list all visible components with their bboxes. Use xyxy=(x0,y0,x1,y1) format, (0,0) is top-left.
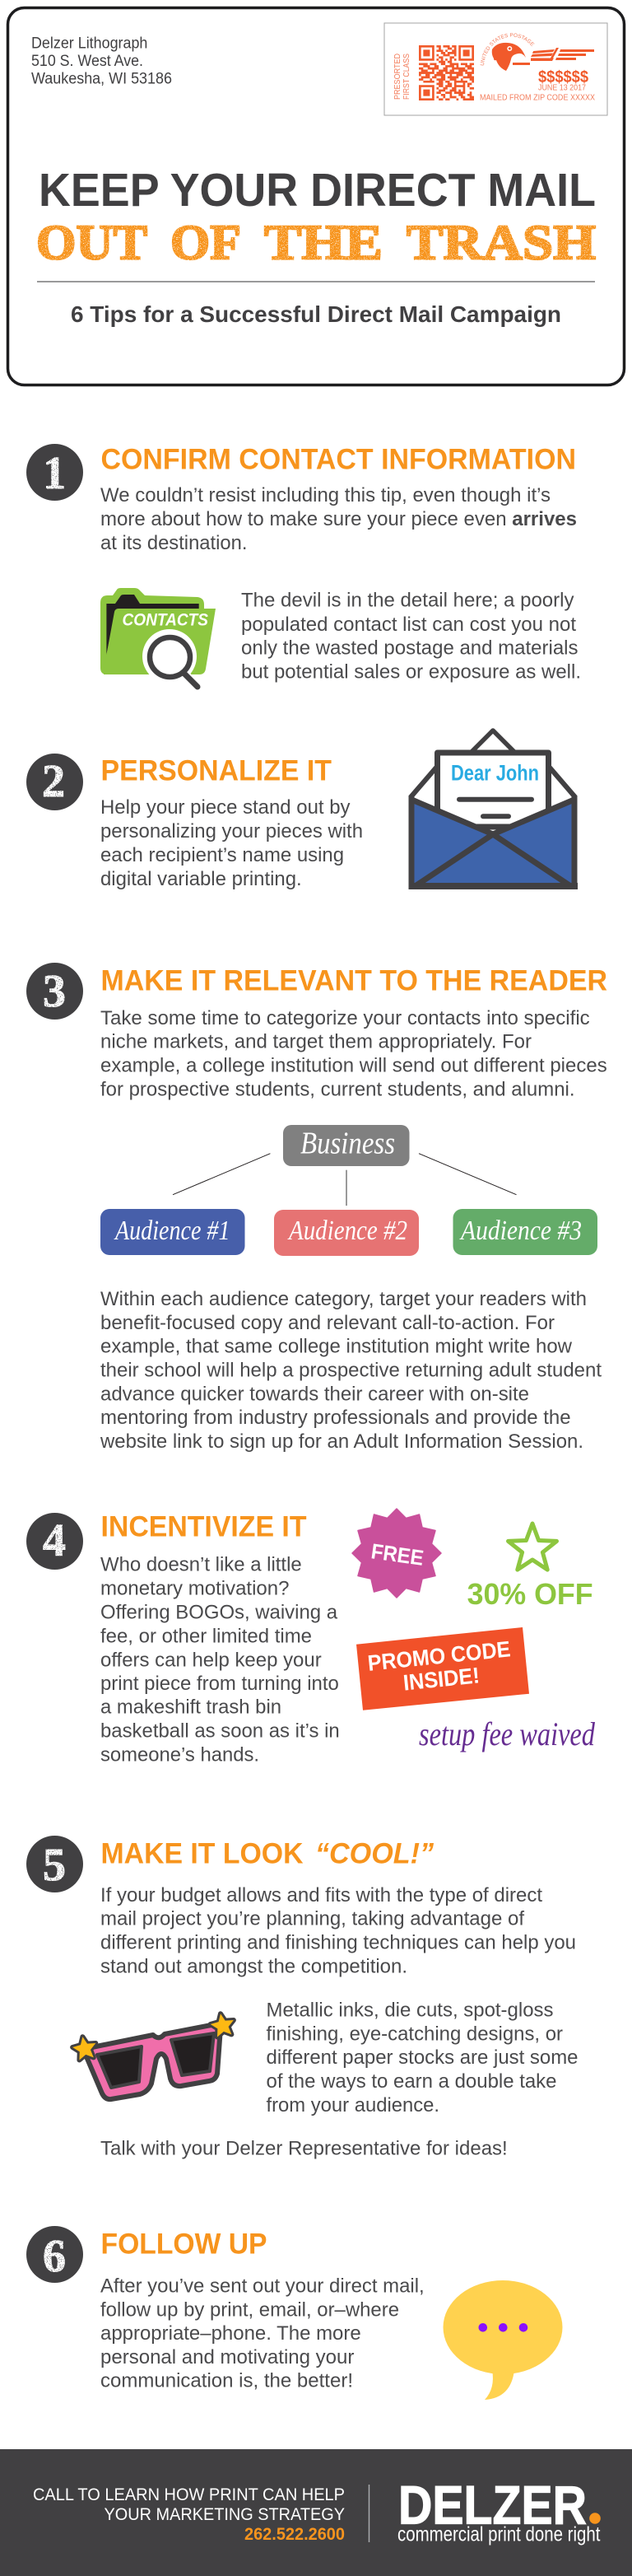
audience 2 box: Audience #2 xyxy=(287,1216,407,1246)
side text: Metallic inks, die cuts, spot-gloss xyxy=(267,1999,553,2021)
panel: footer xyxy=(0,2449,632,2576)
icon: postage eagle xyxy=(492,43,594,71)
promo code tag: PROMO CODE xyxy=(366,1636,512,1676)
return address: 510 S. West Ave. xyxy=(31,53,143,70)
body text: at its destination. xyxy=(100,532,247,554)
heading: PERSONALIZE IT xyxy=(100,754,332,787)
postage amount: $$$$$$ xyxy=(538,68,588,86)
second body text: benefit-focused copy and relevant call-to-action. For xyxy=(100,1312,555,1334)
body text: If your budget allows and fits with the type of direct xyxy=(100,1884,542,1906)
second body text: website link to sign up for an Adult Information Session. xyxy=(100,1430,583,1453)
panel: tip 2 xyxy=(26,730,578,890)
return address xyxy=(31,35,172,88)
panel: envelope header card xyxy=(7,7,625,387)
icon: open envelope with letter xyxy=(408,730,578,889)
body text: mail project you’re planning, taking advantage of xyxy=(100,1908,524,1930)
audience tree diagram xyxy=(100,1125,597,1256)
side text xyxy=(267,1999,578,2116)
presorted label xyxy=(393,54,411,100)
side text: from your audience. xyxy=(267,2094,439,2116)
body text: stand out amongst the competition. xyxy=(100,1955,407,1977)
closing line: Talk with your Delzer Representative for ideas! xyxy=(100,2138,508,2160)
promo code tag: INSIDE! xyxy=(402,1663,481,1696)
side text xyxy=(241,590,581,683)
number badge 2 xyxy=(26,754,83,810)
postage stamp xyxy=(383,23,607,115)
side text: finishing, eye-catching designs, or xyxy=(267,2023,563,2045)
body text: each recipient’s name using xyxy=(100,844,344,866)
body text: print piece from turning into xyxy=(100,1673,339,1695)
heading xyxy=(100,1837,434,1870)
heading: INCENTIVIZE IT xyxy=(100,1510,307,1543)
number badge 6 xyxy=(26,2226,83,2283)
body text: Who doesn’t like a little xyxy=(100,1554,302,1576)
body text: follow up by print, email, or–where xyxy=(100,2298,399,2321)
body text: someone’s hands. xyxy=(100,1743,259,1766)
body text: Offering BOGOs, waiving a xyxy=(100,1602,338,1624)
audience 1 box: Audience #1 xyxy=(114,1216,230,1246)
second body text: example, that same college institution might write how xyxy=(100,1336,573,1358)
body text: appropriate–phone. The more xyxy=(100,2322,361,2345)
call to action: YOUR MARKETING STRATEGY xyxy=(104,2505,345,2524)
body text: monetary motivation? xyxy=(100,1578,290,1600)
presorted label: FIRST CLASS xyxy=(402,54,411,100)
heading: “COOL!” xyxy=(315,1837,434,1870)
postage arc text: UNITED STATES POSTAGE xyxy=(481,33,535,66)
body text: digital variable printing. xyxy=(100,868,302,890)
icon: star sunglasses xyxy=(71,2012,236,2099)
number badge 4 xyxy=(26,1513,83,1570)
body text: more about how to make sure your piece even arrives xyxy=(100,508,577,530)
number badge 4: 4 xyxy=(43,1515,66,1566)
body text: basketball as soon as it’s in xyxy=(100,1720,340,1743)
body text: Take some time to categorize your contacts into specific xyxy=(100,1007,590,1029)
audience 3 box: Audience #3 xyxy=(459,1216,582,1246)
panel: tip 6 xyxy=(26,2226,563,2400)
call to action xyxy=(33,2485,345,2544)
body text: fee, or other limited time xyxy=(100,1625,312,1647)
number badge 3 xyxy=(26,963,83,1020)
body text: offers can help keep your xyxy=(100,1649,322,1671)
body text: a makeshift trash bin xyxy=(100,1696,281,1719)
star offer: 30% OFF xyxy=(467,1577,593,1611)
free starburst: FREE xyxy=(369,1538,425,1570)
second body text: advance quicker towards their career with on-site xyxy=(100,1383,529,1405)
setup fee waived script: setup fee waived xyxy=(419,1715,596,1752)
free starburst xyxy=(352,1509,441,1598)
body text: Help your piece stand out by xyxy=(100,796,351,819)
audience 3 box xyxy=(453,1209,597,1255)
icon: contacts folder: CONTACTS xyxy=(122,610,208,629)
postage date: JUNE 13 2017 xyxy=(538,84,586,92)
return address: Waukesha, WI 53186 xyxy=(31,71,172,88)
side text: populated contact list can cost you not xyxy=(241,614,576,636)
star offer xyxy=(467,1524,593,1611)
number badge 5: 5 xyxy=(43,1840,66,1891)
icon: contacts folder xyxy=(100,588,216,688)
title line two: distressed stencil xyxy=(36,216,596,270)
title line two: distressed stencil: OUT xyxy=(36,216,147,270)
postage zip: MAILED FROM ZIP CODE XXXXX xyxy=(480,94,595,102)
side text: different paper stocks are just some xyxy=(267,2046,578,2069)
side text: only the wasted postage and materials xyxy=(241,637,578,660)
number badge 3: 3 xyxy=(43,966,66,1017)
body text xyxy=(100,1884,576,1977)
subtitle: 6 Tips for a Successful Direct Mail Campaign xyxy=(71,301,561,327)
body text xyxy=(100,1007,607,1100)
heading: MAKE IT RELEVANT TO THE READER xyxy=(100,964,607,997)
return address: Delzer Lithograph xyxy=(31,35,147,52)
body text: communication is, the better! xyxy=(100,2370,353,2392)
body text xyxy=(100,796,363,890)
heading: MAKE IT LOOK xyxy=(100,1837,304,1870)
panel: tip 1 xyxy=(26,442,581,688)
second body text: mentoring from industry professionals and provide the xyxy=(100,1407,571,1429)
call to action: CALL TO LEARN HOW PRINT CAN HELP xyxy=(33,2485,345,2504)
icon: open envelope with letter: Dear John xyxy=(451,761,539,786)
panel: tip 3 xyxy=(26,963,607,1453)
number badge 1 xyxy=(26,444,83,501)
audience 1 box xyxy=(100,1209,245,1255)
side text: of the ways to earn a double take xyxy=(267,2070,556,2093)
second body text: Within each audience category, target your readers with xyxy=(100,1288,587,1310)
presorted label: PRESORTED xyxy=(393,54,402,100)
number badge 6: 6 xyxy=(43,2231,66,2282)
body text: We couldn’t resist including this tip, even though it’s xyxy=(100,484,551,506)
body text xyxy=(100,484,577,554)
side text: The devil is in the detail here; a poorly xyxy=(241,590,574,612)
heading: CONFIRM CONTACT INFORMATION xyxy=(100,442,576,475)
body text: different printing and finishing techniques can help you xyxy=(100,1932,576,1954)
icon: speech bubble xyxy=(443,2280,563,2400)
icon: QR code xyxy=(419,45,474,100)
body text: for prospective students, current students, and alumni. xyxy=(100,1078,574,1100)
body text: personalizing your pieces with xyxy=(100,820,363,842)
title line two: distressed stencil: THE xyxy=(264,216,383,270)
number badge 1: 1 xyxy=(43,448,66,499)
panel: tip 5 xyxy=(26,1836,578,2160)
body text: example, a college institution will send out different pieces xyxy=(100,1055,607,1077)
body text xyxy=(100,2275,425,2392)
second body text xyxy=(100,1288,602,1453)
panel: tip 4 xyxy=(26,1509,596,1766)
call to action: 262.522.2600 xyxy=(244,2525,345,2544)
body text: After you’ve sent out your direct mail, xyxy=(100,2275,425,2297)
Delzer logo: DELZER xyxy=(398,2474,587,2535)
second body text: their school will help a prospective returning adult student xyxy=(100,1360,602,1382)
body text xyxy=(100,1554,340,1766)
business box: Business xyxy=(300,1127,395,1161)
title line two: distressed stencil: OF xyxy=(170,216,241,270)
promo code tag xyxy=(356,1627,529,1710)
heading: FOLLOW UP xyxy=(100,2228,267,2261)
body text: personal and motivating your xyxy=(100,2346,354,2368)
audience 2 box xyxy=(274,1210,419,1256)
title line one: KEEP YOUR DIRECT MAIL xyxy=(39,164,596,217)
number badge 5 xyxy=(26,1836,83,1892)
side text: but potential sales or exposure as well. xyxy=(241,660,581,683)
body text: niche markets, and target them appropriately. For xyxy=(100,1031,532,1053)
number badge 2: 2 xyxy=(42,756,65,807)
title line two: distressed stencil: TRASH xyxy=(407,216,596,270)
